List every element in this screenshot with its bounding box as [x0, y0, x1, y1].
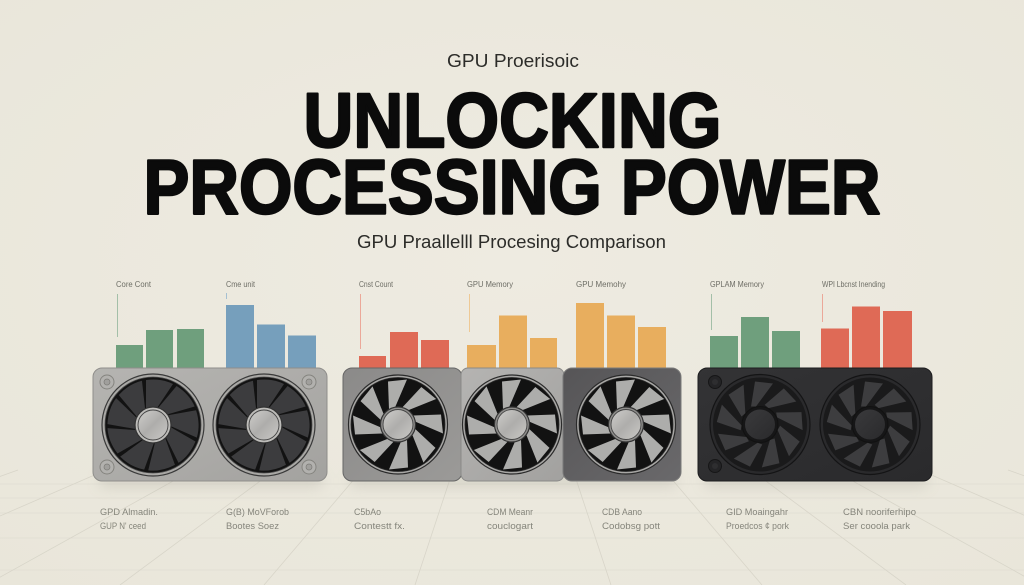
bar chart: red 1: [359, 294, 449, 369]
footer captions: [100, 507, 916, 532]
chart labels: GPLAM Memory: [710, 279, 765, 289]
title: [144, 78, 880, 230]
graphics card: triple unit centre: [461, 368, 564, 481]
bar chart: red 2: [821, 294, 912, 369]
footer captions: Bootes Soez: [226, 521, 279, 532]
bar chart: orange 2: [576, 303, 666, 369]
chart labels: GPU Memory: [467, 279, 514, 289]
footer captions: Ser cooola park: [843, 521, 910, 532]
chart labels: Cnst Count: [359, 279, 394, 289]
title: PROCESSING POWER: [144, 144, 880, 230]
footer captions: Codobsg pott: [602, 521, 660, 532]
eyebrow heading: GPU Proerisoic: [447, 51, 579, 71]
floor shadow: [100, 476, 927, 486]
bar chart: orange 1: [467, 294, 557, 369]
subtitle: GPU Praallelll Procesing Comparison: [357, 231, 666, 252]
footer captions: CDM Meanr: [487, 507, 533, 518]
graphics card: triple unit right: [563, 368, 681, 481]
bar chart: blue: [226, 293, 316, 369]
chart labels: [116, 279, 885, 289]
chart labels: Cme unit: [226, 279, 256, 289]
footer captions: CDB Aano: [602, 507, 642, 518]
footer captions: GUP N' ceed: [100, 521, 146, 532]
footer captions: couclogart: [487, 521, 533, 532]
graphics card: triple unit left: [343, 368, 462, 481]
chart labels: GPU Memohy: [576, 279, 627, 289]
footer captions: GID Moaingahr: [726, 507, 788, 518]
footer captions: CBN nooriferhipo: [843, 507, 916, 518]
title: UNLOCKING: [304, 78, 722, 164]
bar chart: green 1: [116, 294, 204, 369]
footer captions: C5bAo: [354, 507, 381, 518]
footer captions: GPD Almadin.: [100, 507, 158, 518]
bar chart: green 2: [710, 294, 800, 369]
chart labels: WPI Lbcnst Inending: [822, 279, 885, 289]
footer captions: G(B) MoVForob: [226, 507, 289, 518]
footer captions: Contestt fx.: [354, 521, 405, 532]
graphics card: silver dual fan: [93, 368, 327, 481]
graphics card: black dual fan: [698, 368, 932, 481]
floor grid: [0, 470, 1024, 585]
chart labels: Core Cont: [116, 279, 152, 289]
footer captions: Proedcos ¢ pork: [726, 521, 789, 532]
